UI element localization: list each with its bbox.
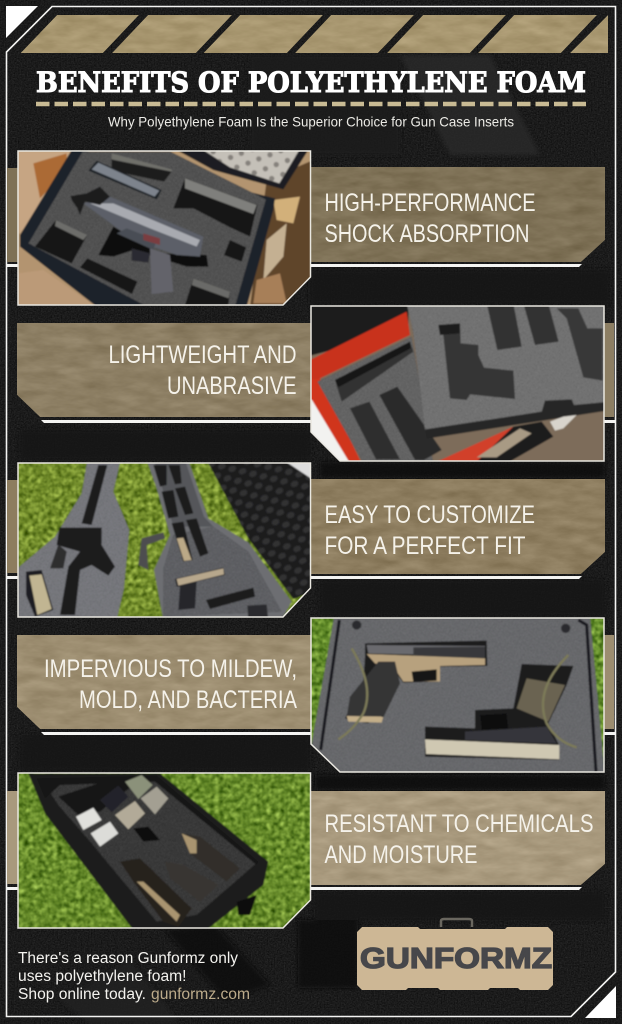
header stripes: [21, 15, 608, 53]
panel: shock absorption: [7, 167, 605, 267]
panel: chemical resistant: [7, 791, 605, 890]
banner: [311, 167, 605, 262]
banner: [17, 635, 311, 729]
panel: lightweight: [17, 323, 615, 423]
banner heading: HIGH-PERFORMANCE: [324, 189, 536, 217]
photo frame 1: [18, 151, 310, 305]
photo: foam insert in red case: [307, 303, 610, 463]
right band stub: [604, 635, 614, 729]
underline: [41, 732, 615, 735]
subtitle: Why Polyethylene Foam Is the Superior Choice for Gun Case Inserts: [108, 114, 514, 130]
underline: [7, 576, 582, 579]
photo frame 2: [311, 306, 604, 461]
banner heading: AND MOISTURE: [324, 841, 478, 869]
banner heading: SHOCK ABSORPTION: [324, 220, 530, 248]
call to action text: [18, 950, 250, 1003]
left band stub: [7, 480, 19, 573]
banner heading: MOLD, AND BACTERIA: [79, 686, 297, 714]
call to action text: Shop online today.: [18, 986, 146, 1003]
underline: [7, 887, 582, 890]
banner heading: [44, 655, 297, 714]
call to action text: uses polyethylene foam!: [18, 968, 186, 985]
photo frame 5: [18, 773, 310, 928]
photo: rifle and pistol in hard cases on grass: [13, 460, 313, 620]
underline: [41, 420, 615, 423]
dashed divider: [36, 102, 586, 106]
photo frame 4: [311, 618, 604, 772]
left band stub: [7, 168, 19, 262]
banner: [311, 791, 605, 885]
photo: open case with submachine gun: [13, 148, 313, 308]
banner heading: [324, 810, 594, 869]
photo frame 3: [18, 463, 310, 617]
banner heading: IMPERVIOUS TO MILDEW,: [44, 655, 297, 683]
logo handle: [441, 919, 472, 927]
panel: mildew resistant: [17, 635, 615, 735]
logo plate: [357, 927, 553, 990]
logo: Gunformz gun case: [357, 919, 553, 990]
call to action text: There's a reason Gunformz only: [18, 950, 238, 967]
banner: [311, 479, 605, 574]
banner heading: [108, 341, 296, 400]
right band stub: [604, 323, 614, 417]
photo: ammo and accessories case on grass: [13, 770, 313, 930]
banner heading: [324, 189, 536, 248]
photo: two pistols in foam: [307, 615, 610, 775]
logo wordmark: GUNFORMZ: [360, 943, 552, 975]
corner triangle: top left: [6, 6, 38, 38]
left band stub: [7, 791, 19, 884]
banner heading: FOR A PERFECT FIT: [324, 532, 526, 560]
call to action text: gunformz.com: [151, 986, 250, 1003]
panel: easy to customize: [7, 479, 605, 579]
banner heading: EASY TO CUSTOMIZE: [324, 501, 535, 529]
corner triangle: bottom right: [585, 986, 616, 1018]
banner heading: LIGHTWEIGHT AND: [108, 341, 296, 369]
underline: [7, 264, 582, 267]
title: BENEFITS OF POLYETHYLENE FOAM: [36, 66, 586, 99]
banner heading: [324, 501, 535, 560]
banner: [17, 323, 311, 417]
banner heading: UNABRASIVE: [167, 372, 296, 400]
